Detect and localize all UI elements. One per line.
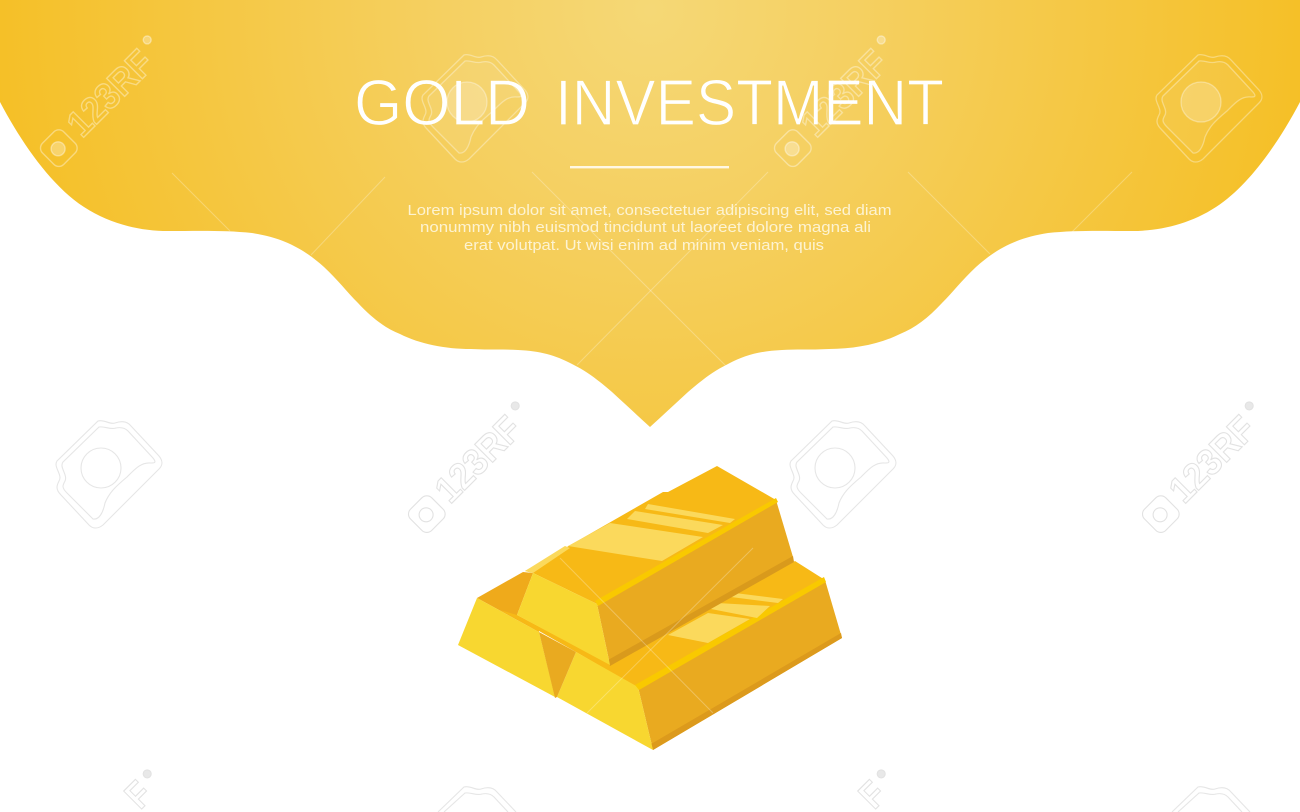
watermark: egg logo middle right bbox=[790, 421, 896, 528]
watermark: 123RF top centre: 123RF bbox=[793, 42, 895, 145]
title: GOLD bbox=[354, 66, 530, 139]
description text: erat volutpat. Ut wisi enim ad minim veniam, quis bbox=[464, 238, 824, 254]
watermark: 123RF middle right: 123RF bbox=[1161, 408, 1263, 511]
watermark: egg logo top centre bbox=[422, 55, 528, 162]
bottom right bar bbox=[517, 561, 842, 750]
watermark: 123RF middle centre: 123RF bbox=[427, 408, 529, 511]
watermark: egg logo bottom centre bbox=[438, 787, 516, 812]
watermark: 123RF top left bbox=[32, 31, 173, 171]
watermark: 123RF top left: 123RF bbox=[59, 42, 161, 145]
watermark: 123RF bottom left bbox=[117, 763, 171, 812]
decorative diagonal watermark lines bbox=[172, 172, 1132, 713]
title bbox=[354, 66, 944, 139]
top bar bbox=[517, 466, 794, 666]
title: INVESTMENT bbox=[555, 66, 944, 139]
title divider bbox=[570, 166, 729, 168]
description text: Lorem ipsum dolor sit amet, consectetuer adipiscing elit, sed diam bbox=[408, 203, 892, 219]
watermark: 123RF middle centre bbox=[400, 397, 541, 537]
watermark: 123RF bottom centre bbox=[851, 763, 905, 812]
watermark: egg logo middle left bbox=[56, 421, 162, 528]
icon: stacked gold bars bbox=[458, 466, 842, 750]
description text: nonummy nibh euismod tincidunt ut laoreet dolore magna ali bbox=[420, 220, 871, 236]
header blob bbox=[0, 0, 1300, 427]
bottom left bar bbox=[458, 572, 576, 698]
watermark: 123RF middle right bbox=[1134, 397, 1275, 537]
watermark: egg logo bottom right bbox=[1172, 787, 1250, 812]
watermark: egg logo top right bbox=[1156, 55, 1262, 162]
watermark: 123RF top centre bbox=[766, 31, 907, 171]
description text bbox=[408, 203, 892, 254]
